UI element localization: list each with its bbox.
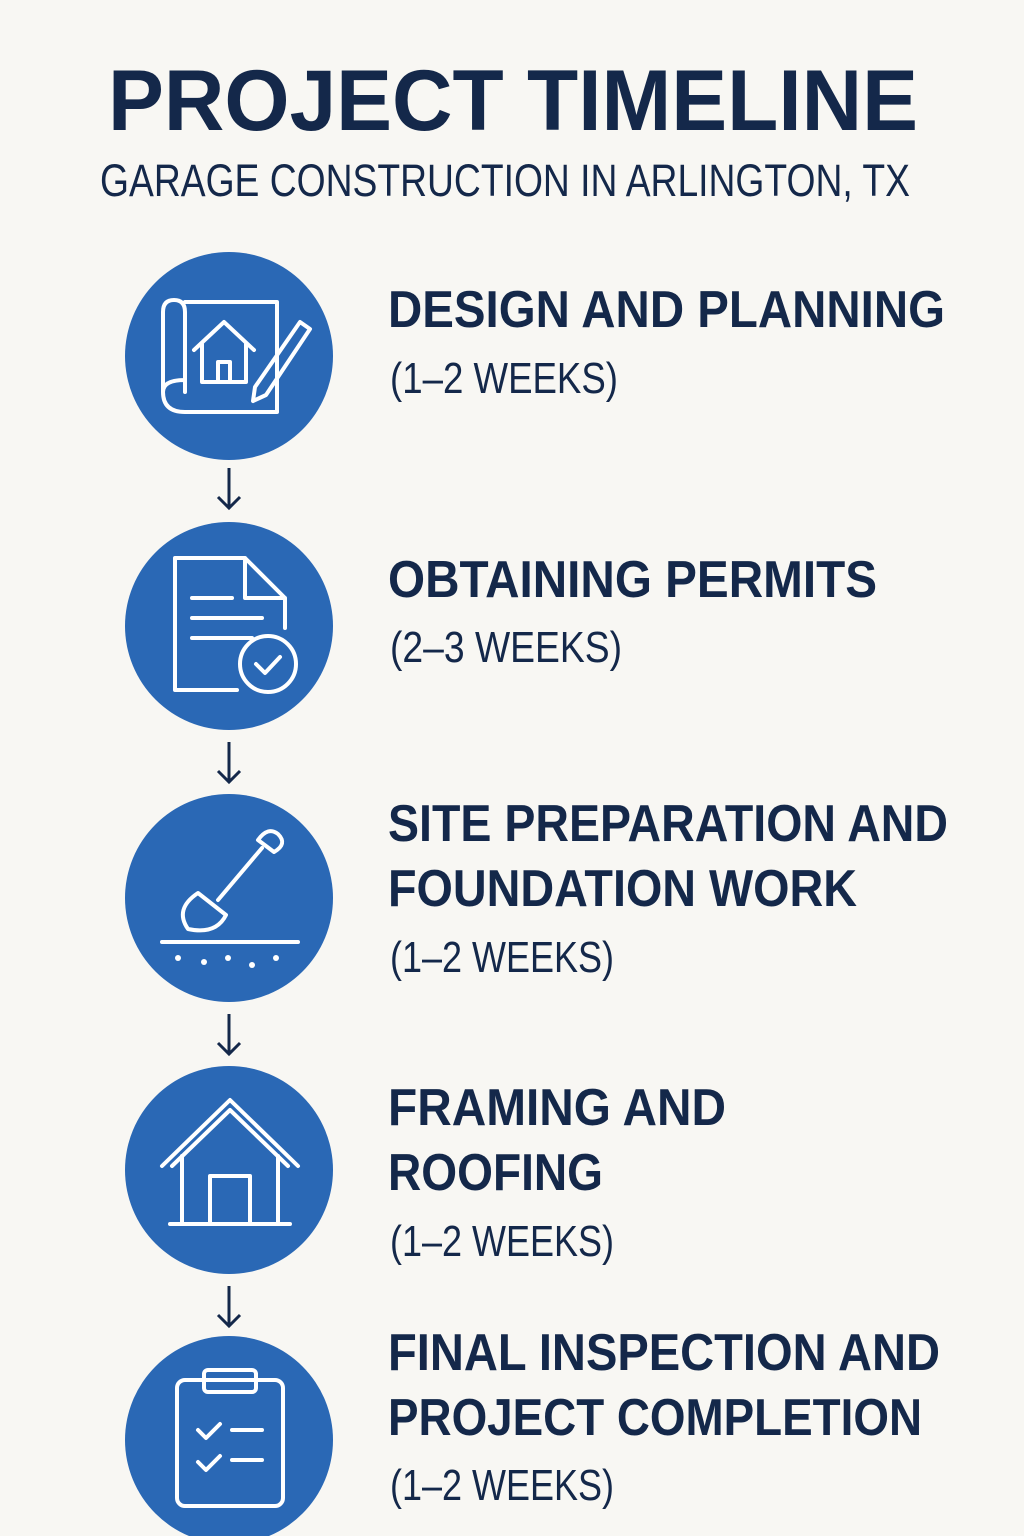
duration: (1–2 WEEKS) xyxy=(390,354,618,403)
arrow xyxy=(218,1014,240,1054)
step 5: final inspection: PROJECT COMPLETION xyxy=(388,1389,922,1447)
duration: (1–2 WEEKS) xyxy=(390,933,614,982)
duration: (2–3 WEEKS) xyxy=(390,623,622,672)
duration: (1–2 WEEKS) xyxy=(390,1461,614,1510)
heading: OBTAINING PERMITS xyxy=(388,551,877,609)
step 3: site prep xyxy=(125,794,948,1002)
arrow xyxy=(218,1286,240,1326)
step 2: permits xyxy=(125,522,877,730)
arrow xyxy=(218,742,240,782)
icon: shovel xyxy=(125,794,333,1002)
icon: house xyxy=(125,1066,333,1274)
heading: FRAMING AND xyxy=(388,1079,726,1137)
step 4: framing xyxy=(125,1066,726,1274)
icon: blueprint xyxy=(125,252,333,460)
title: PROJECT TIMELINE xyxy=(108,53,918,149)
step 3: site prep: FOUNDATION WORK xyxy=(388,860,857,918)
heading: FINAL INSPECTION AND xyxy=(388,1324,940,1382)
step 5: final inspection xyxy=(125,1324,940,1536)
icon: clipboard xyxy=(125,1336,333,1536)
step 4: framing: ROOFING xyxy=(388,1144,603,1202)
step 1: design and planning xyxy=(125,252,945,460)
arrow xyxy=(218,468,240,508)
icon: document xyxy=(125,522,333,730)
heading: DESIGN AND PLANNING xyxy=(388,281,945,339)
heading: SITE PREPARATION AND xyxy=(388,795,948,853)
duration: (1–2 WEEKS) xyxy=(390,1217,614,1266)
